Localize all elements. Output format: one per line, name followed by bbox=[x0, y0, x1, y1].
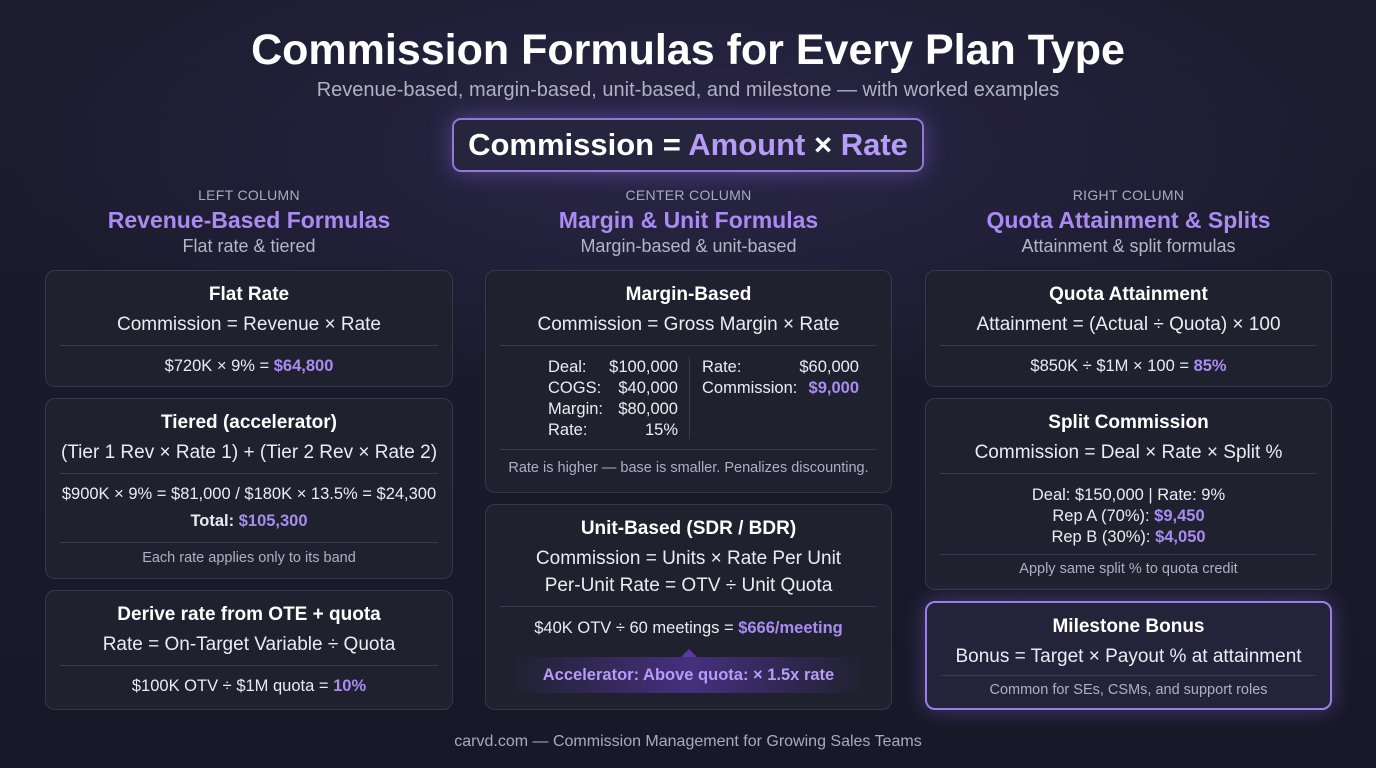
title: Commission Formulas for Every Plan Type bbox=[251, 26, 1125, 74]
footer: carvd.com — Commission Management for Growing Sales Teams bbox=[454, 733, 922, 750]
margin example table: $100,000 bbox=[609, 358, 678, 376]
left column header: Flat rate & tiered bbox=[182, 236, 316, 256]
panel: unit-based: Per-Unit Rate = OTV ÷ Unit Quota bbox=[545, 575, 832, 596]
panel: tiered: Each rate applies only to its band bbox=[142, 550, 356, 566]
panel: quota attainment bbox=[925, 270, 1332, 387]
panel: unit-based bbox=[485, 504, 892, 710]
panel: margin-based: Rate is higher — base is smaller. Penalizes discounting. bbox=[508, 460, 869, 476]
panel: split commission: Apply same split % to quota credit bbox=[1019, 561, 1238, 577]
panel: split commission bbox=[925, 398, 1332, 590]
margin example table: Deal: bbox=[548, 358, 587, 376]
margin example table: Rate: bbox=[548, 421, 587, 439]
center column header: Margin-based & unit-based bbox=[580, 236, 797, 256]
panel: split commission: Rep B (30%): $4,050 bbox=[1051, 528, 1206, 546]
margin example table: $80,000 bbox=[618, 400, 678, 418]
right column header: RIGHT COLUMN bbox=[1073, 187, 1184, 203]
panel: split commission: Deal: $150,000 | Rate: 9% bbox=[1032, 486, 1225, 504]
core formula box bbox=[452, 118, 924, 172]
left column header: LEFT COLUMN bbox=[198, 187, 300, 203]
panel: flat rate: Flat Rate bbox=[209, 284, 289, 305]
center column header bbox=[559, 187, 818, 256]
left column header: Revenue-Based Formulas bbox=[108, 207, 390, 233]
panel: quota attainment: Quota Attainment bbox=[1049, 284, 1208, 305]
center column header: Margin & Unit Formulas bbox=[559, 207, 818, 233]
callout: accelerator bbox=[511, 657, 866, 693]
panel: flat rate bbox=[45, 270, 453, 387]
panel: tiered: Total: $105,300 bbox=[190, 512, 308, 530]
panel: flat rate: $720K × 9% = $64,800 bbox=[165, 357, 333, 375]
panel: margin-based: $60,000 bbox=[799, 358, 859, 376]
panel: quota attainment: Attainment = (Actual ÷ Quota) × 100 bbox=[976, 314, 1281, 335]
panel: margin-based: $9,000 bbox=[809, 379, 859, 397]
margin example table: COGS: bbox=[548, 379, 601, 397]
panel: tiered: Tiered (accelerator) bbox=[161, 412, 337, 433]
panel: split commission: Commission = Deal × Rate × Split % bbox=[975, 442, 1282, 463]
panel: milestone bonus: Bonus = Target × Payout % at attainment bbox=[955, 646, 1302, 667]
margin example table: 15% bbox=[645, 421, 678, 439]
subtitle: Revenue-based, margin-based, unit-based, and milestone — with worked examples bbox=[317, 79, 1059, 101]
center column header: CENTER COLUMN bbox=[625, 187, 752, 203]
panel: split commission: Split Commission bbox=[1048, 412, 1209, 433]
left column header bbox=[108, 187, 390, 256]
margin example table: $40,000 bbox=[618, 379, 678, 397]
panel: unit-based: $40K OTV ÷ 60 meetings = $666/meeting bbox=[534, 619, 843, 637]
core formula box: Commission = Amount × Rate bbox=[468, 127, 908, 162]
panel: split commission: Rep A (70%): $9,450 bbox=[1052, 507, 1205, 525]
panel: derive rate: Derive rate from OTE + quota bbox=[117, 604, 381, 625]
panel: derive rate: $100K OTV ÷ $1M quota = 10% bbox=[132, 677, 366, 695]
panel: margin-based: Commission = Gross Margin × Rate bbox=[538, 314, 840, 335]
panel: margin-based: Commission: bbox=[702, 379, 797, 397]
panel: derive rate: Rate = On-Target Variable ÷ Quota bbox=[103, 634, 395, 655]
margin example table: Margin: bbox=[548, 400, 603, 418]
panel: tiered: (Tier 1 Rev × Rate 1) + (Tier 2 Rev × Rate 2) bbox=[61, 442, 437, 463]
right column header bbox=[986, 187, 1271, 256]
right column header: Attainment & split formulas bbox=[1021, 236, 1236, 256]
margin example table bbox=[548, 358, 678, 439]
callout: accelerator: Accelerator: Above quota: × 1.5x rate bbox=[543, 666, 834, 684]
panel: quota attainment: $850K ÷ $1M × 100 = 85% bbox=[1030, 357, 1227, 375]
panel: derive rate bbox=[45, 590, 453, 710]
panel: milestone bonus: Milestone Bonus bbox=[1052, 616, 1204, 637]
panel: margin-based: Margin-Based bbox=[626, 284, 751, 305]
panel: unit-based: Unit-Based (SDR / BDR) bbox=[581, 518, 796, 539]
panel: unit-based: Commission = Units × Rate Per Unit bbox=[536, 548, 841, 569]
right column header: Quota Attainment & Splits bbox=[986, 207, 1271, 233]
panel: flat rate: Commission = Revenue × Rate bbox=[117, 314, 381, 335]
panel: margin-based bbox=[485, 270, 892, 493]
panel: tiered: $900K × 9% = $81,000 / $180K × 13.5% = $24,300 bbox=[62, 485, 436, 503]
panel: milestone bonus: Common for SEs, CSMs, and support roles bbox=[989, 682, 1268, 698]
panel: milestone bonus bbox=[925, 601, 1332, 710]
panel: margin-based: Rate: bbox=[702, 358, 741, 376]
panel: tiered bbox=[45, 398, 453, 579]
